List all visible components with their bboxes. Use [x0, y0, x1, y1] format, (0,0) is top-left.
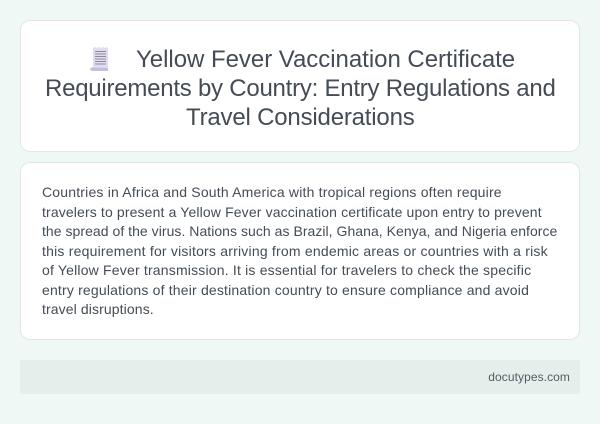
title: Travel Considerations — [186, 104, 415, 131]
footer text: docutypes.com — [488, 370, 570, 384]
panel: description card — [20, 162, 580, 340]
footer bar — [20, 360, 580, 394]
title — [45, 46, 556, 131]
title: Yellow Fever Vaccination Certificate — [136, 46, 515, 73]
title: Requirements by Country: Entry Regulations and — [45, 75, 556, 102]
text block: description: travelers to present a Yellow Fever vaccination certificate upon entry to prevent — [42, 204, 542, 220]
text block: description: the spread of the virus. Nations such as Brazil, Ghana, Kenya, and Nigeria enforce — [42, 223, 557, 239]
text block: description — [42, 184, 557, 317]
icon: document — [90, 47, 108, 71]
text block: description: Countries in Africa and South America with tropical regions often require — [42, 184, 502, 200]
text block: description: this requirement for visitors arriving from endemic areas or countries with a risk — [42, 242, 548, 258]
text block: description: travel disruptions. — [42, 301, 154, 317]
text block: description: of Yellow Fever transmission. It is essential for travelers to check the specific — [42, 262, 531, 278]
panel: title card — [20, 20, 580, 152]
text block: description: entry regulations of their destination country to ensure compliance and avoid — [42, 282, 529, 298]
